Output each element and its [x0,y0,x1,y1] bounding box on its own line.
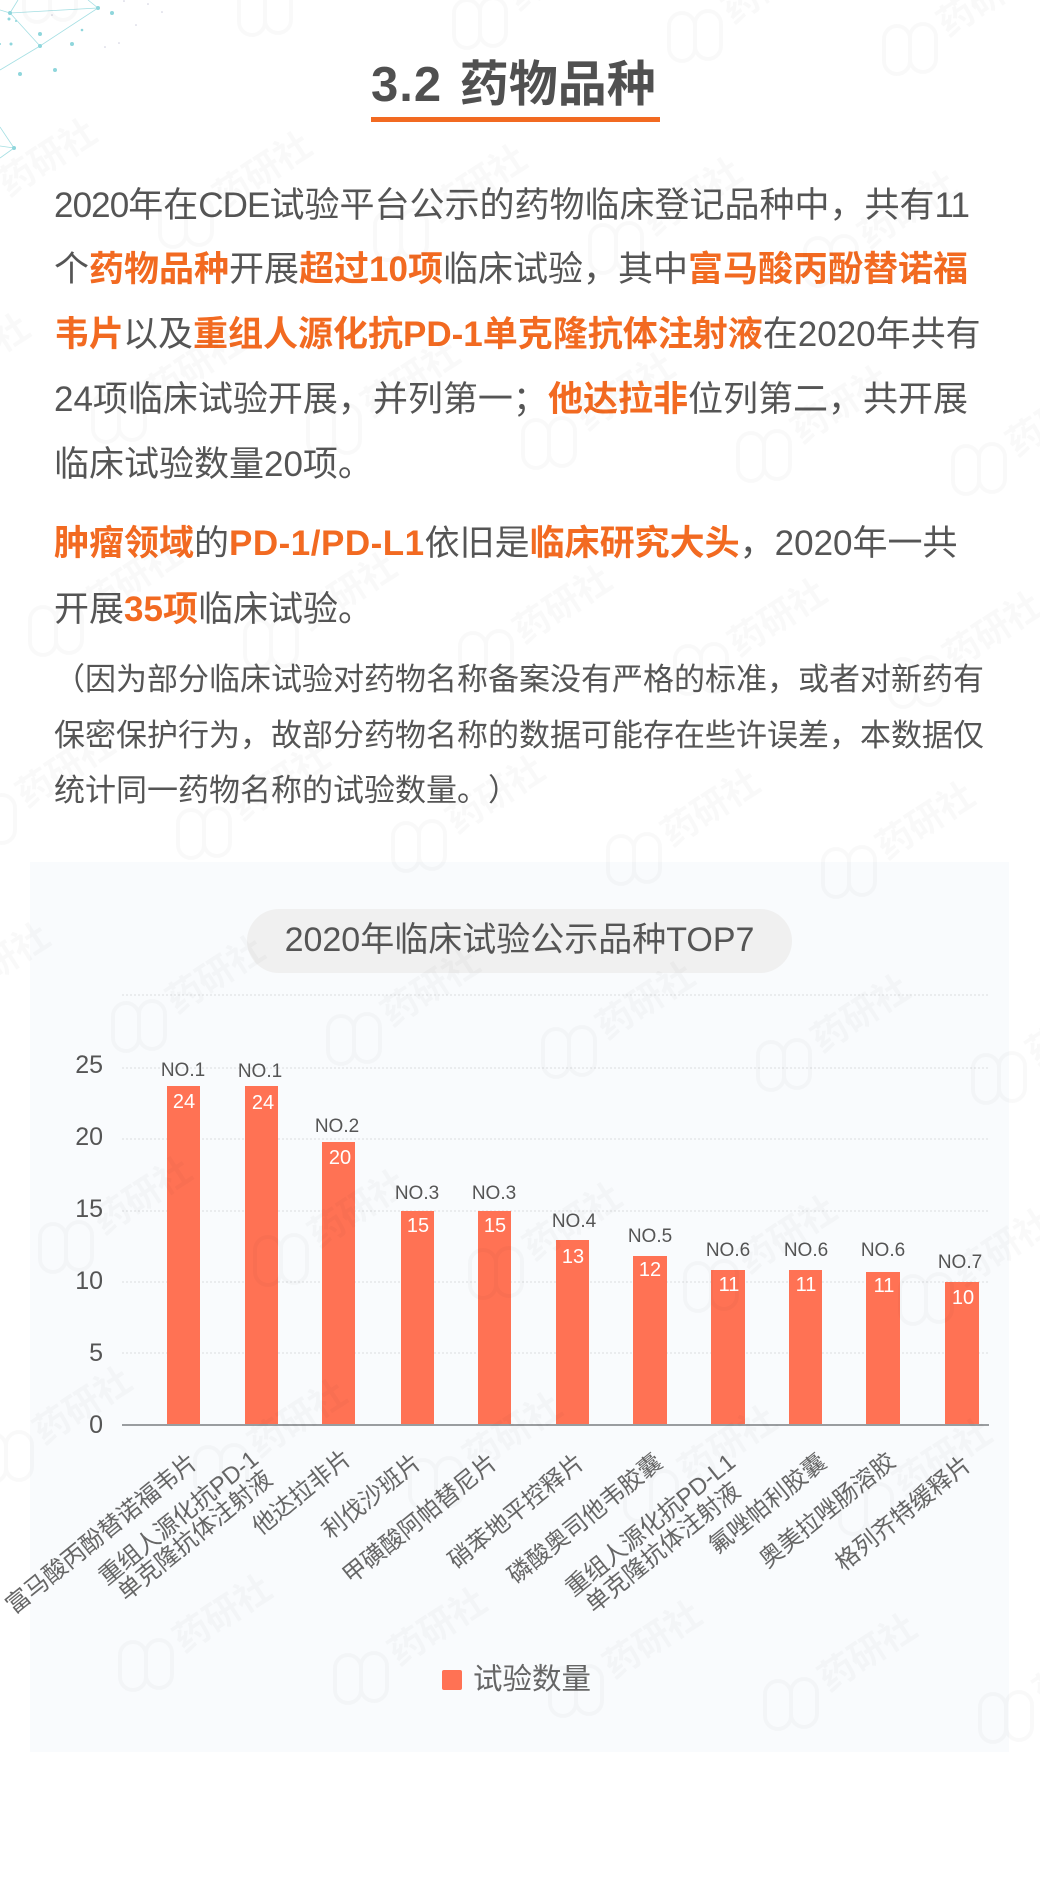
rank labels: NO.3 [395,1183,439,1204]
rank labels: NO.2 [315,1116,359,1137]
text block: note [54,662,984,808]
value labels: 24 [173,1091,195,1113]
rank labels: NO.7 [938,1252,982,1273]
text block: PD-1 paragraph: 开展35项临床试验。 [54,590,373,629]
y axis labels: 15 [75,1195,103,1223]
value labels: 20 [329,1147,351,1169]
text block: main paragraph: 临床试验数量20项。 [54,445,373,484]
rank labels: NO.3 [472,1183,516,1204]
rank labels [161,1060,982,1273]
rank labels: NO.1 [161,1060,205,1081]
category labels: 富马酸丙酚替诺福韦片 [1,1449,203,1619]
rank labels: NO.4 [552,1211,597,1232]
value labels: 15 [484,1215,506,1237]
x axis line [122,1424,989,1426]
category labels: 重组人源化抗PD-L1 [560,1449,741,1602]
value labels: 11 [874,1275,894,1297]
category labels: 格列齐特缓释片 [830,1451,977,1576]
text block: main paragraph: 24项临床试验开展，并列第一；他达拉非位列第二，共开展 [54,380,968,419]
category labels: 重组人源化抗PD-1 [94,1446,264,1591]
y axis labels: 20 [75,1123,103,1151]
y axis labels: 0 [89,1411,103,1439]
text block: main paragraph: 个药物品种开展超过10项临床试验，其中富马酸丙酚替诺福 [54,250,968,289]
text block: PD-1 paragraph: 肿瘤领域的PD-1/PD-L1依旧是临床研究大头，2020年一共 [54,524,958,563]
category labels: 单克隆抗体注射液 [113,1466,278,1606]
legend: 试验数量 [473,1663,591,1696]
title: 3.2 药物品种 [371,58,656,112]
category labels: 硝苯地平控释片 [443,1449,590,1574]
rank labels: NO.5 [628,1226,672,1247]
title underline [371,117,660,122]
y axis labels: 5 [89,1339,103,1367]
y axis labels [75,1051,103,1439]
rank labels: NO.6 [706,1240,750,1261]
category labels: 单克隆抗体注射液 [581,1478,746,1618]
value labels: 12 [639,1259,661,1281]
text block: note: 统计同一药物名称的试验数量。） [54,773,519,808]
category labels: 他达拉非片 [247,1445,357,1541]
category labels: 甲磺酸阿帕替尼片 [338,1449,503,1589]
y axis labels: 10 [75,1267,103,1295]
y axis labels: 25 [75,1051,103,1079]
text block: main paragraph [54,186,981,484]
value labels: 24 [252,1092,274,1114]
text block: note: 保密保护行为，故部分药物名称的数据可能存在些许误差，本数据仅 [54,718,984,753]
category labels: 氟唑帕利胶囊 [704,1449,832,1560]
value labels: 10 [952,1287,974,1309]
value labels [173,1091,974,1309]
category labels: 奥美拉唑肠溶胶 [754,1448,901,1573]
rank labels: NO.6 [784,1240,828,1261]
value labels: 11 [719,1274,739,1296]
value labels: 11 [796,1274,816,1296]
panel: chart background [30,862,1009,1752]
category labels: 磷酸奥司他韦胶囊 [503,1449,668,1589]
rank labels: NO.6 [861,1240,905,1261]
category labels [1,1445,977,1619]
text block: main paragraph: 2020年在CDE试验平台公示的药物临床登记品种中，共有11 [54,186,969,225]
text block: note: （因为部分临床试验对药物名称备案没有严格的标准，或者对新药有 [54,662,984,697]
decoration: network nodes top-left [0,0,163,158]
chart title pill: 2020年临床试验公示品种TOP7 [285,921,754,959]
bars [167,1086,979,1425]
value labels: 13 [562,1246,584,1268]
text block: main paragraph: 韦片以及重组人源化抗PD-1单克隆抗体注射液在2020年共有 [54,315,981,354]
chart title pill [247,909,792,973]
category labels: 利伐沙班片 [317,1449,427,1545]
value labels: 15 [407,1215,429,1237]
text block: PD-1 paragraph [54,524,958,629]
rank labels: NO.1 [238,1061,282,1082]
